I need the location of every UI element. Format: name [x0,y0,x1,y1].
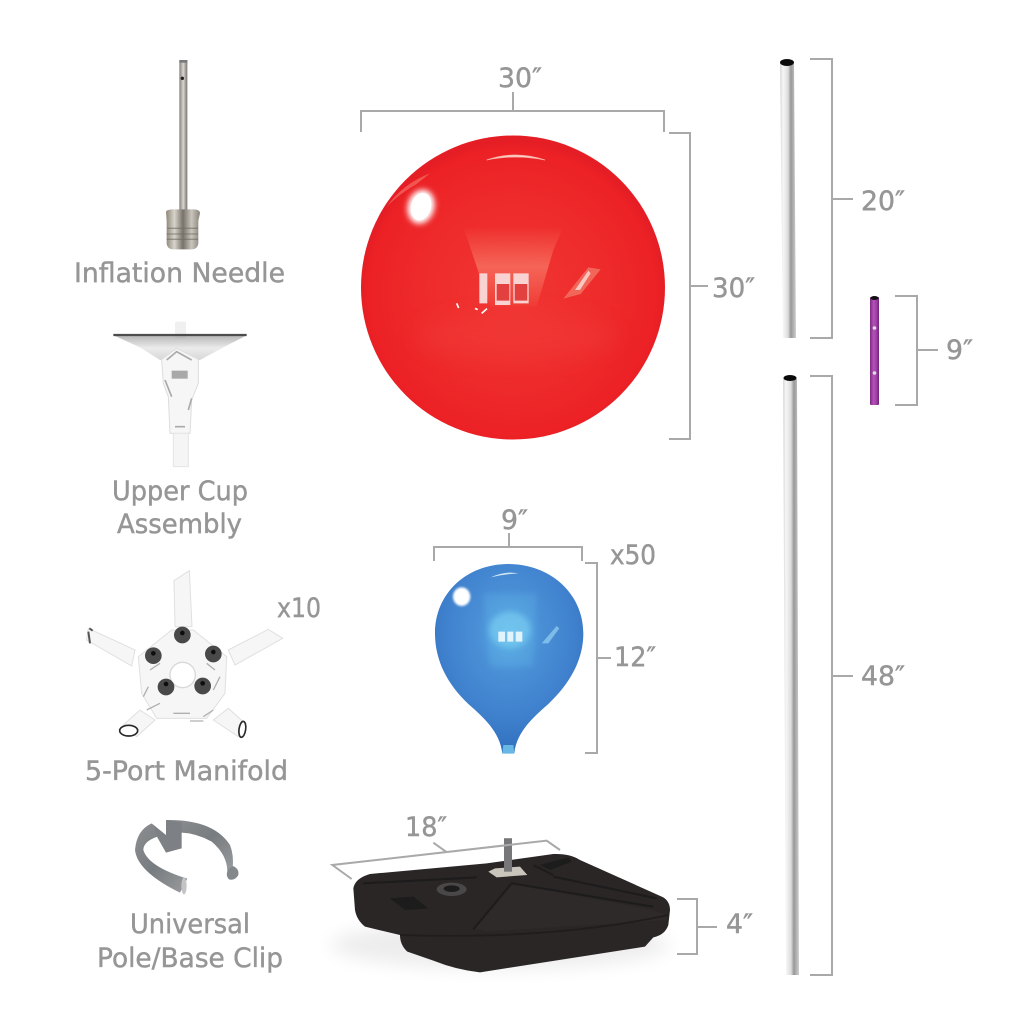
dimension: 9 inch width bracket: 9″ [501,505,528,536]
dimension: 30 inch height bracket: 30″ [712,273,755,304]
dimension: 30 inch width bracket: 30″ [498,63,542,94]
label: Universal Pole/Base Clip: Universal [130,909,250,940]
dimension: 30 inch width bracket [361,63,664,132]
blue balloon [435,564,583,754]
icon: upper cup assembly [113,322,247,467]
dimension: 12 inch height bracket [585,563,656,753]
pole: 9 inch purple connector [870,296,879,405]
label: Upper Cup Assembly [112,476,248,540]
pole: 48 inch [783,375,799,975]
dimension: 4 inch bracket [677,899,753,954]
label: Inflation Needle: Inflation Needle [74,258,285,289]
label: Upper Cup Assembly: Upper Cup [112,476,248,507]
label: x10: x10 [277,593,321,624]
dimension: 48 inch bracket [810,376,905,975]
icon: universal pole/base clip [135,820,238,894]
label: x50: x50 [610,540,656,571]
dimension: 30 inch height bracket [669,133,755,439]
label: Upper Cup Assembly: Assembly [117,509,242,540]
icon: inflation needle [166,60,200,249]
dimension: 9 inch width bracket [434,505,582,561]
pole: 20 inch [780,59,796,338]
dimension: 18 inch bracket: 18″ [405,812,447,843]
dimension: 20 inch bracket: 20″ [861,186,905,217]
dimension: 9 inch bracket: 9″ [946,335,973,366]
label: Universal Pole/Base Clip [97,909,283,974]
base shadow [330,921,670,969]
label: Universal Pole/Base Clip: Pole/Base Clip [97,943,283,974]
dimension: 18 inch bracket [332,812,560,879]
red balloon [361,136,665,440]
dimension: 48 inch bracket: 48″ [861,661,905,692]
dimension: 9 inch bracket [895,296,973,405]
dimension: 12 inch height bracket: 12″ [614,642,656,673]
dimension: 4 inch bracket: 4″ [726,909,753,940]
label: 5-Port Manifold: 5-Port Manifold [85,756,288,787]
weighted base [353,838,670,972]
dimension: 20 inch bracket [810,59,905,338]
icon: 5-port manifold [87,571,283,738]
